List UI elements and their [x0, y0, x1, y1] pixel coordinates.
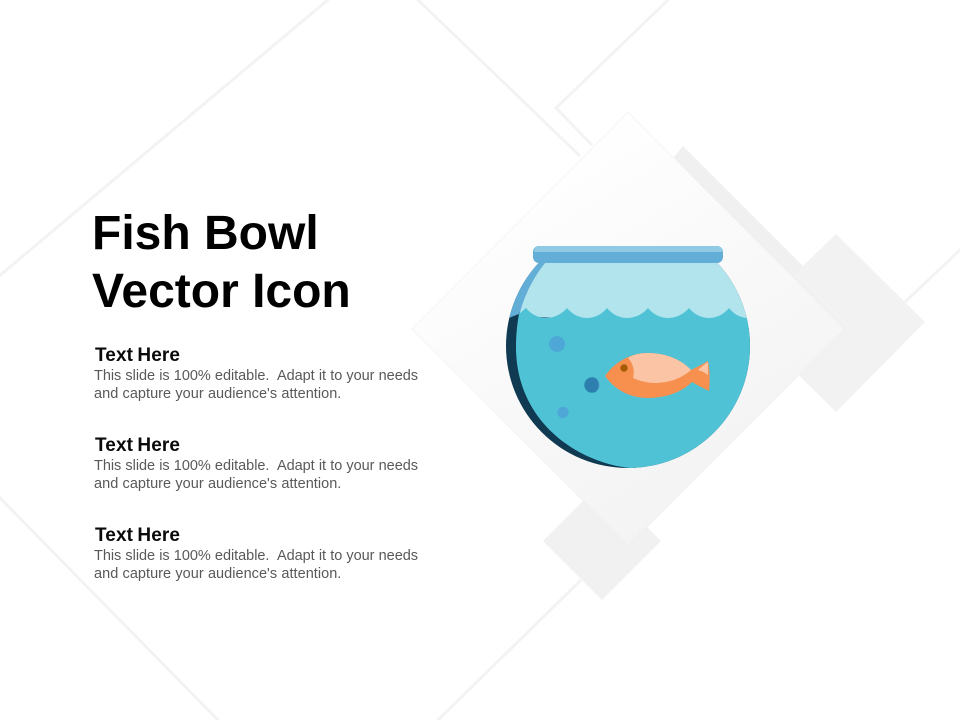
bubble near fish: [584, 377, 600, 393]
bowl water: [516, 308, 750, 468]
text block 1: This slide is 100% editable. Adapt it to your needs: [94, 368, 418, 384]
text block 2: Text Here: [95, 435, 180, 456]
text block 1: [94, 345, 418, 402]
bowl glass edge: [509, 263, 545, 318]
title: [92, 207, 351, 318]
bowl air area: [520, 263, 749, 329]
fish eye: [620, 364, 628, 372]
decorative band behind main diamond: [674, 146, 825, 310]
text block 3: Text Here: [95, 525, 180, 546]
text block 2: [94, 435, 418, 492]
decorative diamond: right: [745, 234, 925, 412]
bowl body: [506, 263, 750, 468]
text block 3: This slide is 100% editable. Adapt it to your needs: [94, 548, 418, 564]
text block 3: and capture your audience's attention.: [94, 566, 341, 582]
decorative diamond: bottom: [543, 482, 661, 600]
icon: fish bowl: [506, 246, 750, 468]
bubble large: [549, 336, 565, 352]
text block 1: Text Here: [95, 345, 180, 366]
icon: goldfish: [605, 353, 710, 398]
main diamond panel: [412, 112, 845, 546]
title: Fish Bowl: [92, 207, 319, 260]
text block 3: [94, 525, 418, 582]
bubble small: [557, 407, 569, 418]
text block 2: and capture your audience's attention.: [94, 476, 341, 492]
bowl rim: [533, 246, 723, 263]
bowl dark shadow crescent: [506, 263, 750, 468]
text block 2: This slide is 100% editable. Adapt it to your needs: [94, 458, 418, 474]
text block 1: and capture your audience's attention.: [94, 386, 341, 402]
title: Vector Icon: [92, 265, 351, 318]
